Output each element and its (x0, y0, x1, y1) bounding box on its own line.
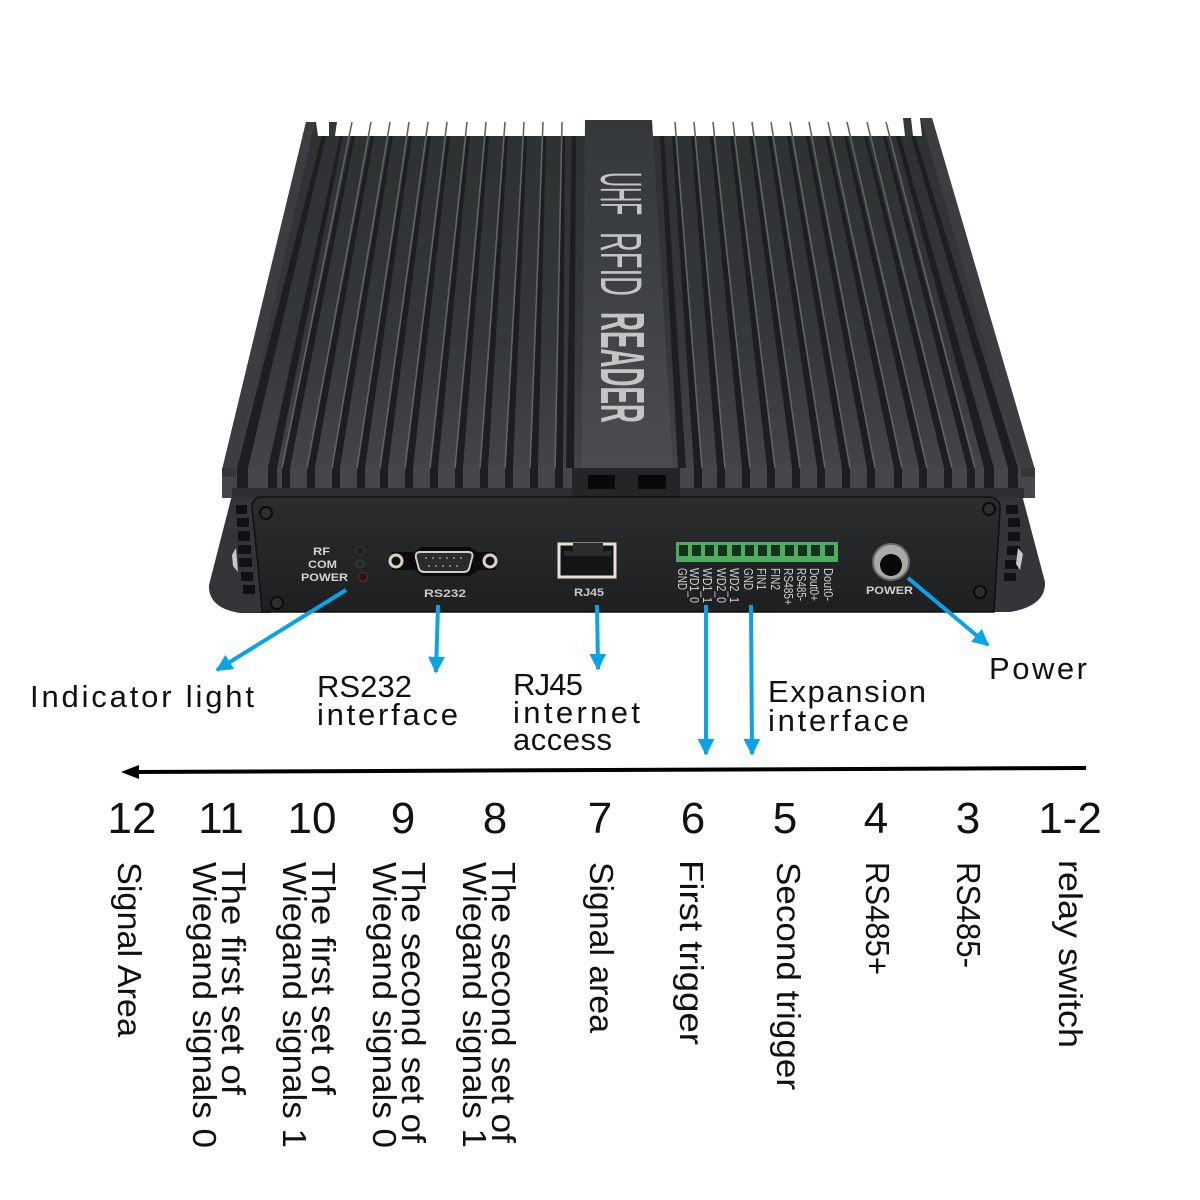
pin 9: Wiegand signals 0 (366, 862, 403, 1148)
heat sink top (222, 118, 1035, 498)
terminal pin labels: WD1_0 (687, 568, 702, 603)
terminal pin labels: FIN1 (754, 568, 769, 590)
pin 9 (366, 862, 432, 1148)
pin 7: Signal area (583, 862, 620, 1034)
label: RS232 interface: interface (317, 697, 458, 732)
green terminal block (675, 542, 838, 605)
label: RS232 interface: RS232 (317, 669, 412, 704)
pin numbers: 4 (864, 794, 888, 843)
power jack (866, 544, 913, 597)
terminal pin labels: GND (741, 568, 756, 590)
pin numbers: 9 (391, 794, 415, 843)
pin numbers: 8 (483, 794, 507, 843)
pin 12: Signal Area (111, 862, 148, 1038)
arrow: indicator light (217, 590, 346, 670)
nameplate text (587, 172, 656, 423)
RS232 port (390, 547, 496, 600)
pin 6: First trigger (673, 860, 710, 1045)
arrow: second trigger (751, 605, 752, 754)
label: RS232 interface (317, 669, 458, 732)
nameplate text: UHF (588, 172, 653, 215)
indicator lights (301, 546, 368, 584)
pin 1-2: relay switch (1052, 860, 1089, 1048)
terminal pin labels: RS485+ (781, 568, 796, 605)
indicator lights: COM (308, 559, 337, 571)
foot flanges (209, 495, 1045, 613)
indicator lights: POWER (301, 572, 348, 584)
pin numbers: 5 (773, 794, 797, 843)
label: RJ45 internet access: RJ45 (513, 667, 583, 702)
label: expansion interface: Expansion (768, 674, 926, 709)
pin 8: The second set of (485, 862, 522, 1144)
pin numbers: 7 (588, 794, 612, 843)
terminal pin labels: FIN2 (768, 568, 783, 590)
pin 3: RS485- (950, 862, 987, 968)
label: RJ45 internet access: internet (513, 695, 640, 730)
label: RJ45 internet access (513, 667, 640, 757)
pin 10 (276, 862, 342, 1148)
pin descriptions (111, 860, 1089, 1148)
terminal pin labels: RS485- (794, 568, 809, 601)
label: RJ45 internet access: access (513, 722, 612, 757)
pin numbers: 11 (198, 794, 244, 843)
label: power: Power (989, 651, 1087, 686)
arrow: first trigger (704, 605, 708, 754)
terminal pin labels: Dout0+ (807, 568, 822, 601)
RJ45 port (559, 543, 615, 599)
pin 10: Wiegand signals 1 (276, 862, 313, 1148)
RJ45 panel text: RJ45 (574, 587, 604, 599)
arrow: RJ45 (597, 605, 598, 669)
left fins (237, 122, 576, 468)
label: expansion interface (768, 674, 926, 738)
pin numbers: 10 (288, 794, 336, 843)
pin numbers: 3 (956, 794, 980, 843)
center nameplate: READER (587, 312, 656, 423)
center nameplate (572, 120, 680, 498)
callout arrows (217, 578, 988, 754)
right fins (660, 122, 1018, 468)
pin 4: RS485+ (859, 862, 896, 975)
pin numbers: 6 (681, 794, 705, 843)
pin 8 (456, 862, 522, 1148)
indicator lights: RF (313, 546, 330, 558)
arrow: power (908, 578, 988, 645)
pin numbers: 1-2 (1038, 794, 1102, 843)
fin front ends (222, 468, 1035, 498)
label: indicator light: Indicator light (30, 679, 254, 714)
nameplate text: RFID (588, 232, 653, 296)
pin 5: Second trigger (770, 862, 807, 1090)
terminal pin labels: WD1_1 (700, 568, 715, 603)
pin 9: The second set of (395, 862, 432, 1144)
terminal pin labels: Dout0- (821, 568, 836, 601)
arrow: RS232 (436, 605, 438, 672)
callout labels (30, 651, 1087, 757)
device: UHF RFID reader (209, 118, 1045, 613)
pin 11: Wiegand signals 0 (186, 862, 223, 1148)
RS232 panel text: RS232 (424, 588, 466, 600)
pin 10: The first set of (305, 862, 342, 1096)
pin numbers (108, 794, 1102, 843)
pin 8: Wiegand signals 1 (456, 862, 493, 1148)
terminal pin labels: WD2_0 (714, 568, 729, 603)
terminal pin labels: WD2_1 (727, 568, 742, 603)
terminal pin labels: GND (675, 568, 690, 590)
label: expansion interface: interface (768, 703, 909, 738)
pin 11: The first set of (215, 862, 252, 1096)
terminal pin labels (675, 568, 836, 605)
power panel text: POWER (866, 585, 913, 597)
pin 11 (186, 862, 252, 1148)
front panel (252, 497, 1000, 612)
pin numbers: 12 (108, 794, 156, 843)
pin order arrow (121, 765, 1086, 779)
